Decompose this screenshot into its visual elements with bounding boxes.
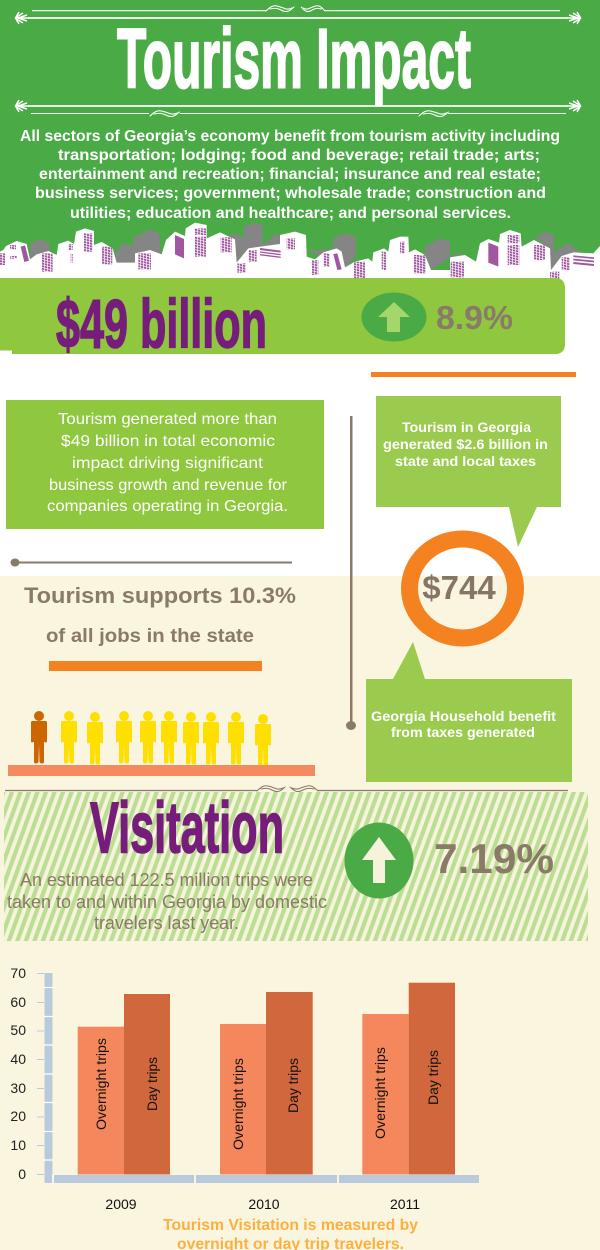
y axis: 10: [10, 1137, 26, 1153]
intro text: All sectors of Georgia’s economy benefit from tourism activity including: [20, 128, 560, 145]
jobs heading: Tourism supports 10.3%: [24, 583, 296, 608]
visitation copy: An estimated 122.5 million trips were: [20, 870, 313, 890]
chart caption: Tourism Visitation is measured by: [163, 1217, 418, 1234]
callout text: state and local taxes: [395, 454, 536, 469]
windows: [0, 228, 570, 280]
visitation copy: travelers last year.: [94, 913, 239, 933]
heading: Visitation: [90, 788, 284, 868]
intro text: utilities; education and healthcare; and personal services.: [70, 205, 511, 222]
divider: orange rule: [371, 372, 576, 377]
icon: up arrow: [344, 822, 414, 898]
jobs heading: of all jobs in the state: [46, 625, 254, 647]
callout: state and local taxes: [376, 396, 561, 547]
divider with ornament: [5, 786, 568, 792]
chart caption: [163, 1217, 418, 1250]
bars 2010: [220, 992, 313, 1174]
y axis: 0: [18, 1166, 26, 1182]
solid and striped windows: [21, 235, 594, 270]
impact copy: companies operating in Georgia.: [47, 498, 288, 515]
y axis: [10, 965, 53, 1184]
panel: visitation: [4, 788, 588, 941]
bars 2011: Overnight trips: [372, 1047, 388, 1139]
callout text: from taxes generated: [391, 725, 535, 740]
visitation copy: taken to and within Georgia by domestic: [7, 892, 327, 912]
visitation copy: [7, 870, 327, 933]
intro text: entertainment and recreation; financial; insurance and real estate;: [39, 166, 541, 183]
callout text: [383, 420, 548, 469]
panel: economic impact text: [6, 400, 324, 529]
callout text: [371, 709, 556, 740]
bars 2009: Overnight trips: [93, 1038, 109, 1130]
pictogram: people: [31, 711, 271, 766]
amount: $744: [422, 569, 496, 606]
y axis: 60: [10, 994, 26, 1010]
callout text: Georgia Household benefit: [371, 709, 556, 724]
x axis floor: [54, 1175, 479, 1183]
cream lower background: [0, 576, 600, 1250]
bars 2011: [362, 983, 455, 1174]
intro text: transportation; lodging; food and beverage; retail trade; arts;: [58, 147, 540, 164]
y axis: 70: [10, 965, 26, 981]
impact copy: [47, 411, 288, 515]
percent change: 8.9%: [436, 299, 513, 336]
connector: vertical line with dot: [346, 416, 356, 730]
y axis: 50: [10, 1022, 26, 1038]
ornament: bottom frame: [15, 100, 581, 117]
callout: household benefit: [366, 642, 572, 782]
callout text: Tourism in Georgia: [402, 420, 531, 435]
bars 2009: Day trips: [144, 1057, 160, 1111]
ornament: top frame: [15, 6, 581, 24]
impact copy: Tourism generated more than: [58, 411, 277, 428]
impact copy: $49 billion in total economic: [61, 433, 275, 450]
panel: $49 billion banner: [0, 278, 565, 362]
skyline: [0, 223, 600, 285]
year labels: [105, 1196, 420, 1212]
y axis: 40: [10, 1051, 26, 1067]
bars 2009: [78, 994, 170, 1174]
callout text: generated $2.6 billion in: [383, 437, 548, 452]
year labels: 2011: [390, 1196, 420, 1212]
y axis: 20: [10, 1108, 26, 1124]
year labels: 2009: [105, 1196, 137, 1212]
divider: orange bar: [49, 661, 262, 671]
big number: $49 billion: [56, 286, 267, 362]
white skyline: [0, 223, 600, 285]
ring: $744: [410, 539, 516, 638]
icons: yellow people: [61, 711, 271, 766]
bar chart: trips by year: [10, 965, 479, 1212]
buildings behind: [30, 223, 582, 270]
icon: up arrow: [362, 292, 426, 342]
impact copy: business growth and revenue for: [49, 477, 288, 494]
bars 2011: Day trips: [425, 1050, 441, 1105]
jobs heading: [24, 583, 296, 647]
base bar under people: [8, 765, 315, 776]
intro text: business services; government; wholesale trade; construction and: [35, 185, 546, 202]
connector: horizontal line with dot: [10, 558, 292, 566]
bars 2010: Overnight trips: [230, 1058, 246, 1150]
percent change: 7.19%: [434, 835, 554, 882]
intro text: [20, 128, 560, 222]
icon: highlighted person: [31, 711, 47, 764]
y axis: 30: [10, 1080, 26, 1096]
bars 2010: Day trips: [285, 1058, 301, 1113]
panel: header: [0, 0, 600, 274]
impact copy: impact driving significant: [72, 455, 264, 472]
year labels: 2010: [248, 1196, 280, 1212]
